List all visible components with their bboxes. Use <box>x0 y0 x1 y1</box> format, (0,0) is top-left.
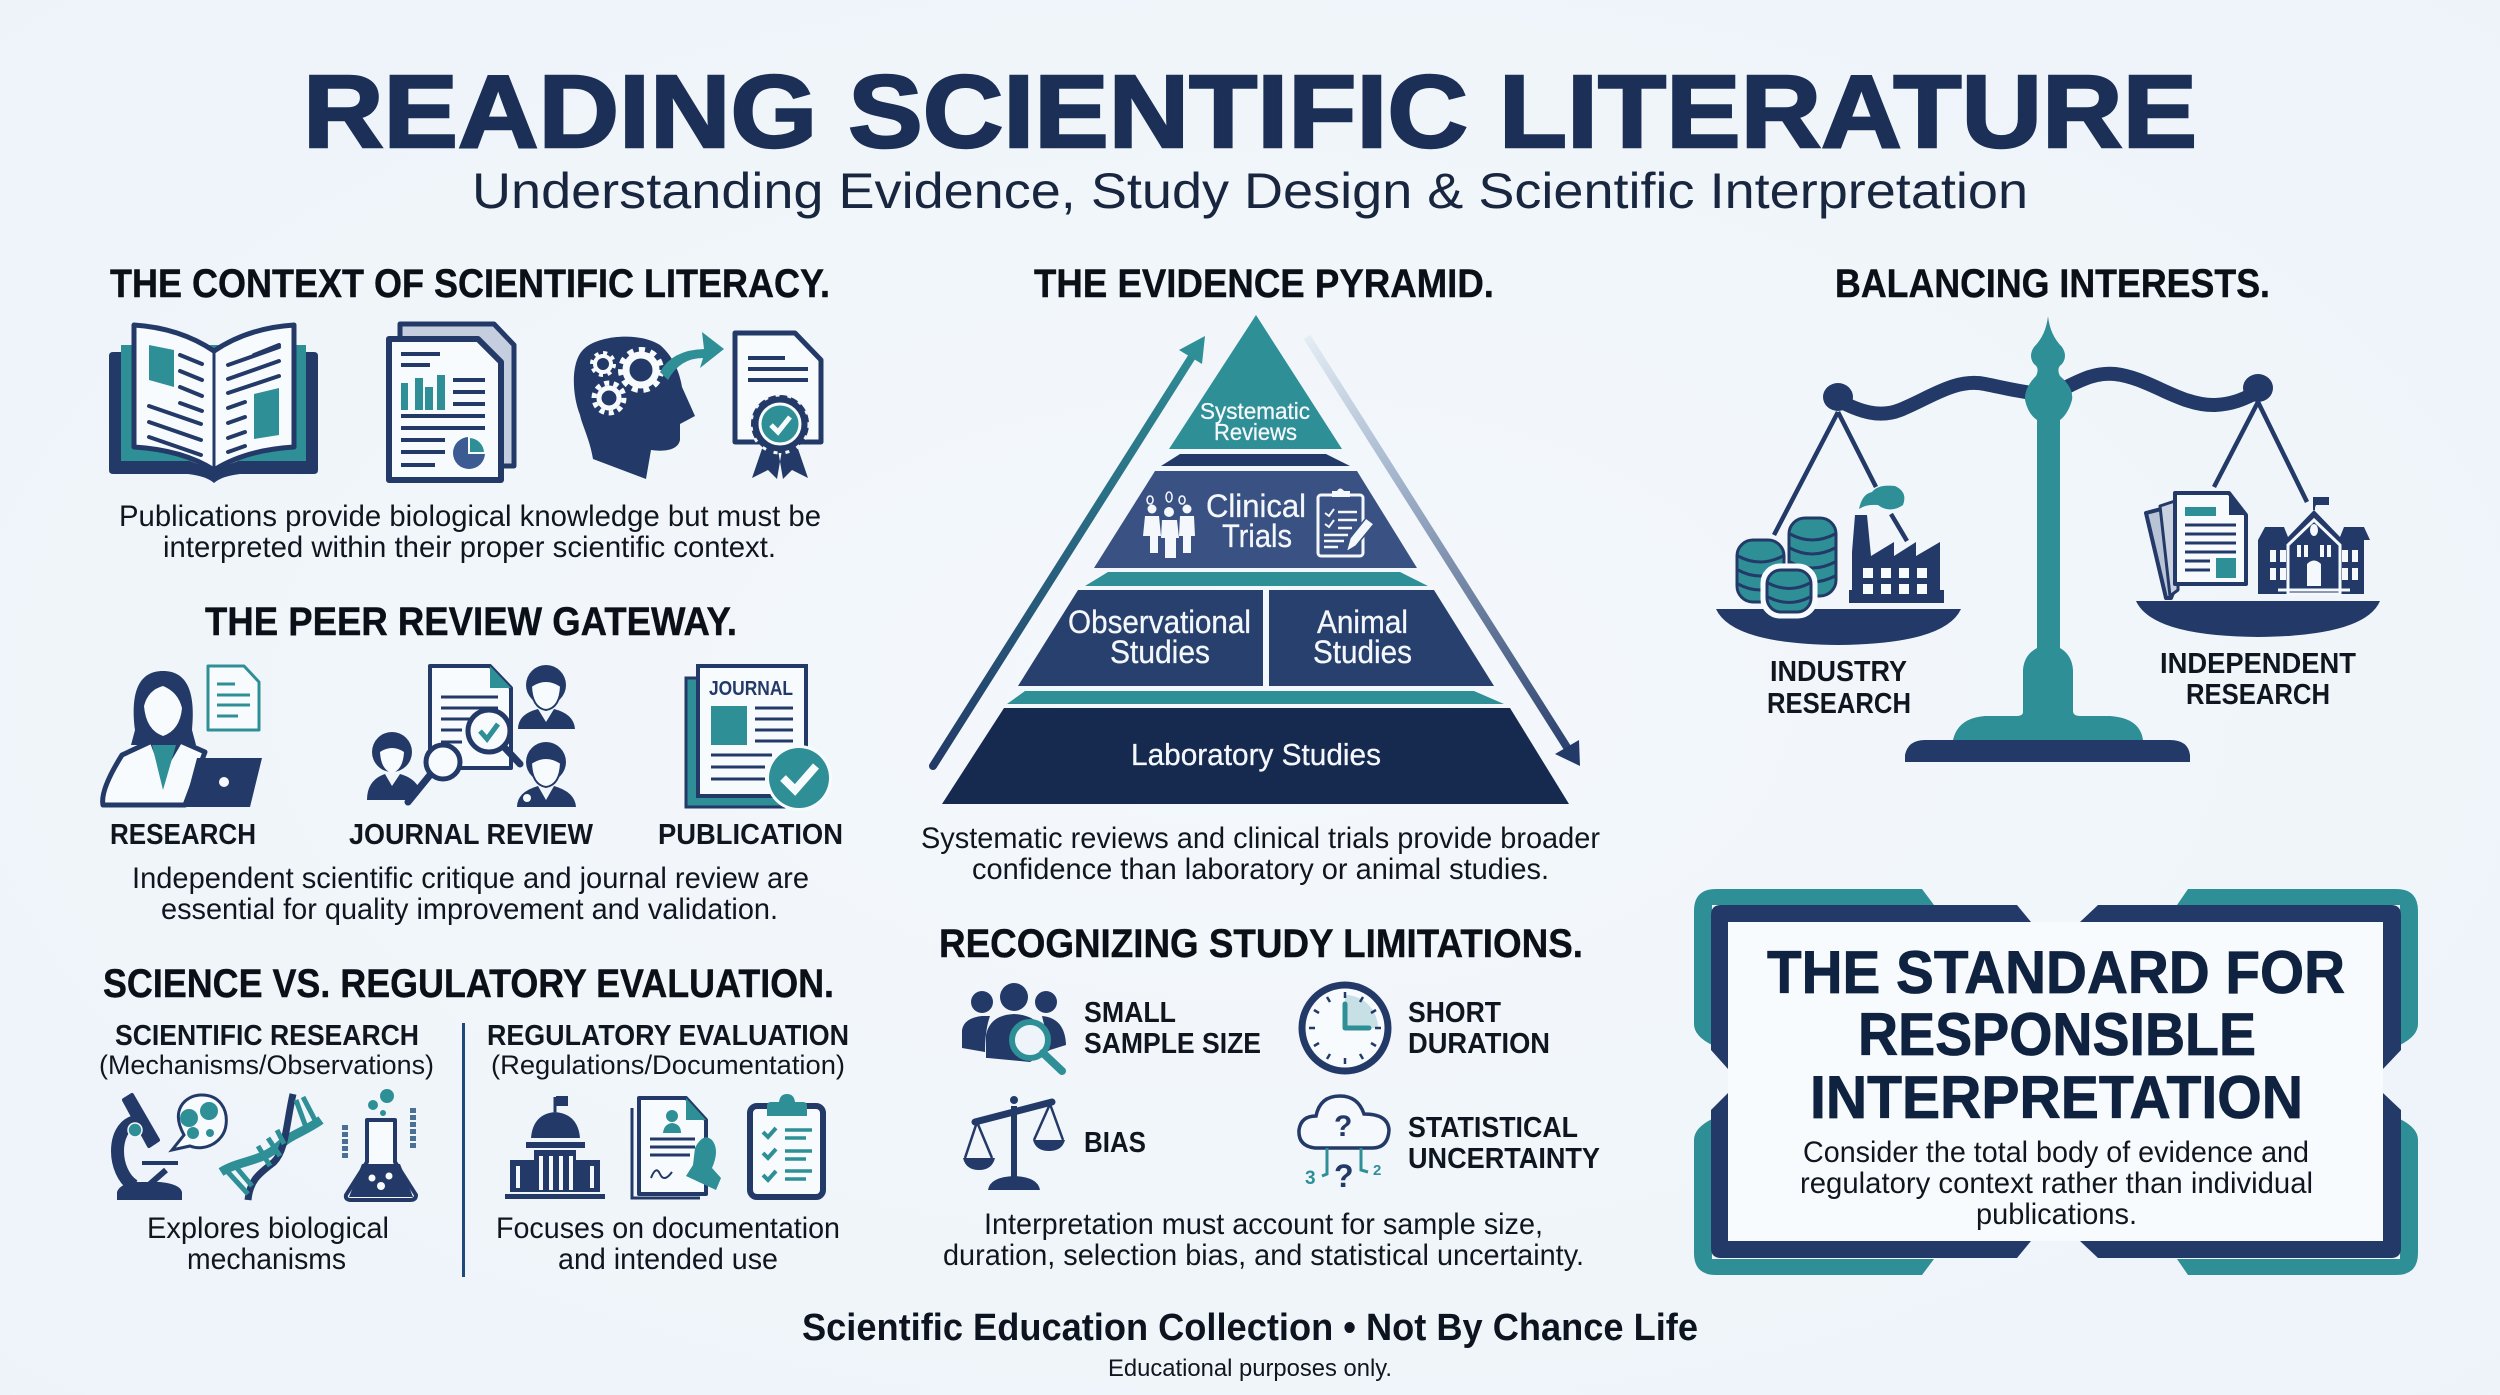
icon: research document with charts <box>389 324 514 480</box>
callout heading: THE STANDARD FOR <box>1767 939 2345 1006</box>
footer note: Educational purposes only. <box>1108 1355 1392 1382</box>
tier: observational studies: Studies <box>1110 634 1210 670</box>
description: Independent scientific critique and journal review are <box>132 862 809 895</box>
tier band teal lower <box>1007 691 1504 704</box>
callout text <box>1800 1136 2313 1231</box>
description line 2: duration, selection bias, and statistical uncertainty. <box>943 1239 1584 1272</box>
callout text: publications. <box>1976 1198 2137 1231</box>
icon: journal publication: JOURNAL <box>709 678 793 700</box>
callout heading <box>1767 939 2345 1131</box>
description: regulatory: Focuses on documentation <box>496 1212 840 1245</box>
tier: laboratory studies <box>942 708 1569 804</box>
heading: BALANCING INTERESTS. <box>1835 262 2270 306</box>
icon: uncertainty cloud <box>1299 1096 1389 1194</box>
tier: laboratory studies: Laboratory Studies <box>1131 737 1381 772</box>
icon: trial participants <box>1143 492 1195 558</box>
label: short duration <box>1408 997 1550 1060</box>
arrow: up <box>933 336 1205 766</box>
left pan <box>1716 609 1961 645</box>
right pan <box>2136 601 2380 637</box>
icon: people with magnifier <box>962 983 1066 1071</box>
heading: SCIENCE VS. REGULATORY EVALUATION. <box>103 962 834 1006</box>
label: small sample size <box>1084 997 1261 1060</box>
scale strings <box>1774 402 2307 541</box>
panel: balancing interests <box>1716 262 2380 762</box>
label: statistical uncertainty: STATISTICAL <box>1408 1112 1578 1144</box>
icon: scales <box>963 1096 1065 1190</box>
label: independent research <box>2160 648 2356 711</box>
tier: animal studies <box>1269 590 1494 686</box>
heading: THE PEER REVIEW GATEWAY. <box>205 600 737 644</box>
frame <box>1694 889 2418 1275</box>
description line 2: interpreted within their proper scientific context. <box>163 531 776 564</box>
tier: systematic reviews: Systematic <box>1200 398 1310 424</box>
tier: clinical trials <box>1094 471 1417 568</box>
callout text: regulatory context rather than individual <box>1800 1167 2313 1200</box>
title: READING SCIENTIFIC LITERATURE <box>303 54 2197 169</box>
scale beam <box>1823 374 2273 414</box>
description: Publications provide biological knowledge but must be <box>119 500 821 533</box>
icon: trial clipboard <box>1318 488 1374 556</box>
tier: animal studies: Animal <box>1317 604 1408 640</box>
panel: evidence pyramid <box>921 262 1600 886</box>
icon: DNA helix <box>221 1094 321 1200</box>
tier: systematic reviews <box>1169 315 1342 449</box>
column divider <box>462 1023 465 1277</box>
label: statistical uncertainty <box>1408 1112 1600 1175</box>
icon: flask <box>345 1089 416 1200</box>
icon: university building <box>2258 497 2370 594</box>
icon: uncertainty cloud: 2 <box>1373 1162 1381 1179</box>
icon: uncertainty cloud: ? <box>1334 1110 1352 1143</box>
label: independent research: RESEARCH <box>2186 679 2330 711</box>
scale column and base <box>1905 316 2190 762</box>
icon: microscope <box>117 1095 182 1200</box>
icon: government building <box>505 1096 605 1199</box>
panel: peer review gateway <box>103 600 843 926</box>
callout heading: INTERPRETATION <box>1810 1064 2303 1131</box>
icon: clock <box>1302 985 1388 1071</box>
column subheading: mechanisms: (Mechanisms/Observations) <box>99 1050 434 1080</box>
description: Systematic reviews and clinical trials provide broader <box>921 822 1600 855</box>
icon: checklist clipboard <box>750 1094 823 1197</box>
icon: open book <box>109 325 318 483</box>
column heading: scientific research: SCIENTIFIC RESEARCH <box>115 1020 419 1052</box>
panel: science vs regulatory evaluation <box>99 962 849 1277</box>
column heading: regulatory evaluation: REGULATORY EVALUATION <box>487 1020 849 1052</box>
label: publication: PUBLICATION <box>658 819 843 851</box>
description: Interpretation must account for sample size, <box>984 1208 1543 1241</box>
heading: RECOGNIZING STUDY LIMITATIONS. <box>939 922 1583 966</box>
label: short duration: SHORT <box>1408 997 1501 1029</box>
description line 2: confidence than laboratory or animal studies. <box>972 853 1549 886</box>
label: short duration: DURATION <box>1408 1028 1550 1060</box>
label: small sample size: SMALL <box>1084 997 1176 1029</box>
heading: THE EVIDENCE PYRAMID. <box>1034 262 1494 306</box>
label: bias: BIAS <box>1084 1127 1146 1159</box>
tier: observational studies <box>1018 590 1263 686</box>
panel: context of scientific literacy <box>109 262 830 564</box>
callout text: Consider the total body of evidence and <box>1803 1136 2309 1169</box>
label: research: RESEARCH <box>110 819 256 851</box>
tier: animal studies: Studies <box>1313 634 1412 670</box>
tier: observational studies: Observational <box>1068 604 1251 640</box>
icon: coins <box>1737 518 1836 615</box>
label: journal review: JOURNAL REVIEW <box>349 819 594 851</box>
tier: systematic reviews: Reviews <box>1214 419 1297 445</box>
column subheading: regulations: (Regulations/Documentation) <box>491 1050 845 1080</box>
label: statistical uncertainty: UNCERTAINTY <box>1408 1143 1600 1175</box>
panel: recognizing study limitations <box>939 922 1600 1272</box>
label: industry research: INDUSTRY <box>1770 656 1907 688</box>
tier band teal <box>1085 572 1428 586</box>
label: industry research: RESEARCH <box>1767 688 1911 720</box>
icon: microscope sample bubble <box>172 1095 226 1150</box>
icon: journal review <box>367 665 576 807</box>
icon: journal publication <box>686 666 832 811</box>
icon: stamped document <box>632 1098 721 1198</box>
icon: researcher at laptop <box>103 666 262 807</box>
tier: clinical trials: Trials <box>1222 518 1292 554</box>
label: industry research <box>1767 656 1911 720</box>
icon: factory <box>1849 486 1944 603</box>
arrow: down <box>1307 337 1580 766</box>
icon: uncertainty cloud: 3 <box>1305 1168 1316 1189</box>
heading: THE CONTEXT OF SCIENTIFIC LITERACY. <box>110 262 830 306</box>
icon: documents <box>2146 493 2246 598</box>
label: small sample size: SAMPLE SIZE <box>1084 1028 1261 1060</box>
tier band navy <box>1161 454 1350 466</box>
icon: uncertainty cloud: ? <box>1334 1158 1354 1194</box>
tier: clinical trials: Clinical <box>1206 488 1306 524</box>
subtitle: Understanding Evidence, Study Design & Scientific Interpretation <box>472 163 2028 219</box>
icon: head with gears and certified document <box>574 332 821 479</box>
description: science line 2: mechanisms <box>187 1243 346 1276</box>
footer: Scientific Education Collection • Not By Chance Life <box>802 1307 1698 1349</box>
panel: the standard for responsible interpretation <box>1694 889 2418 1275</box>
label: independent research: INDEPENDENT <box>2160 648 2356 680</box>
description: science: Explores biological <box>147 1212 389 1245</box>
description line 2: essential for quality improvement and validation. <box>161 893 778 926</box>
description: regulatory line 2: and intended use <box>558 1243 778 1276</box>
callout heading: RESPONSIBLE <box>1858 1001 2256 1068</box>
